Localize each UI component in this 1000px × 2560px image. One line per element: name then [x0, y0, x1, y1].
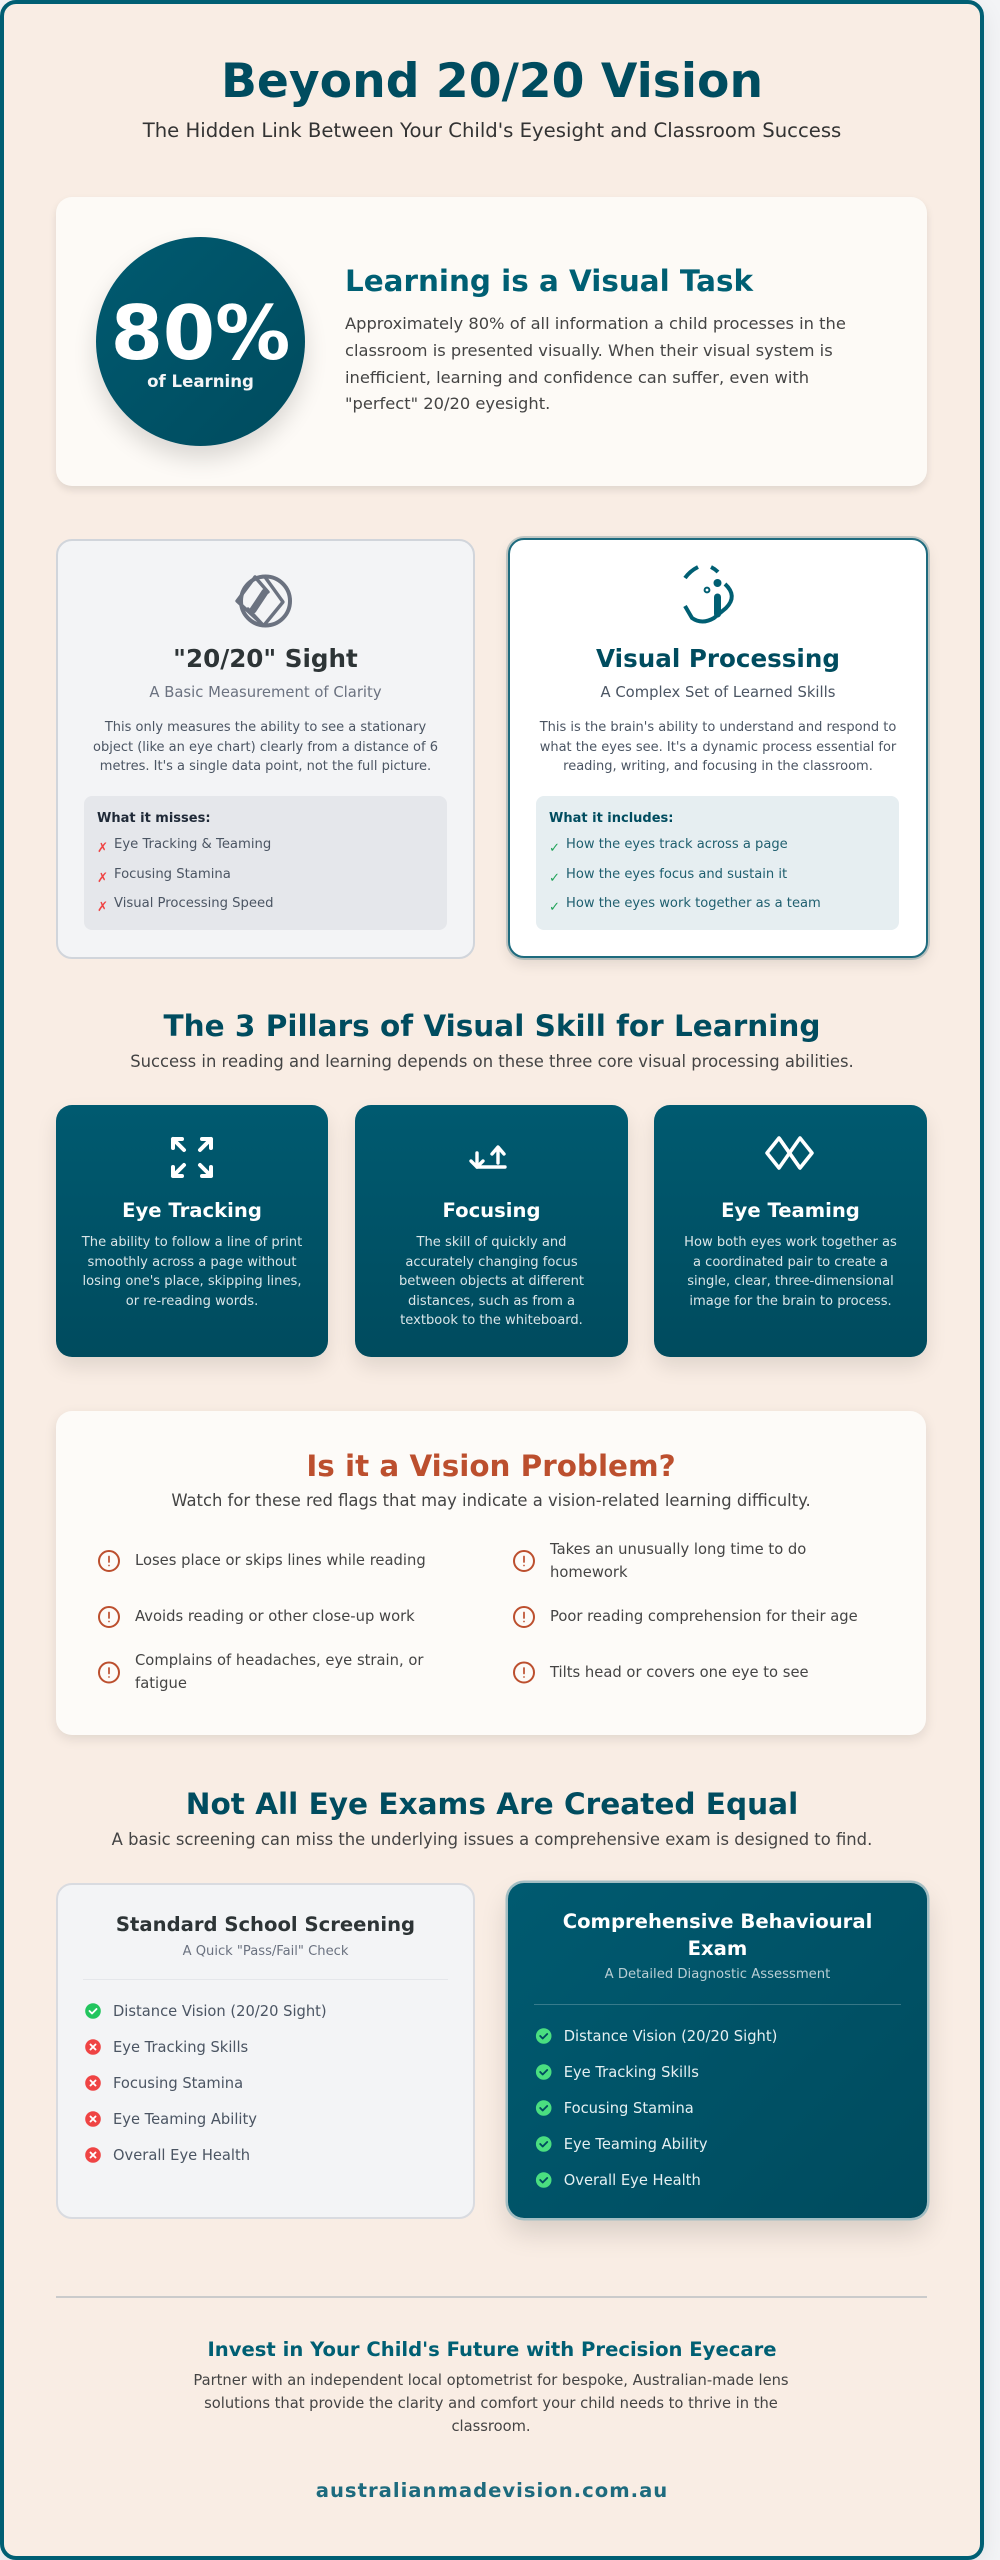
- comparison checklist: Eye Tracking Skills: [564, 2064, 699, 2081]
- card description: what the eyes see. It's a dynamic process essential for: [540, 740, 896, 755]
- footer heading: Invest in Your Child's Future with Precision Eyecare: [207, 2338, 777, 2361]
- pillar description: a coordinated pair to create a: [693, 1255, 888, 1270]
- section heading: eye exams: Not All Eye Exams Are Created Equal: [186, 1787, 798, 1821]
- red flag item: Complains of headaches, eye strain, or: [135, 1652, 423, 1669]
- pillar description: accurately changing focus: [405, 1255, 578, 1270]
- card description: [540, 720, 896, 774]
- list box: what it includes: ✓: [549, 870, 560, 886]
- section subheading: A basic screening can miss the underlying issues a comprehensive exam is designed to find.: [112, 1830, 872, 1849]
- footer text: [193, 2372, 789, 2435]
- panel body text: inefficient, learning and confidence can suffer, even with: [345, 368, 809, 387]
- icon: focus arrows: [469, 1145, 507, 1169]
- list box: what it misses: ✗: [97, 900, 108, 915]
- pillar description: The skill of quickly and: [416, 1235, 566, 1250]
- card subheading: A Complex Set of Learned Skills: [601, 684, 835, 701]
- footer website link: australianmadevision.com.au: [316, 2479, 668, 2502]
- pillar description: losing one's place, skipping lines,: [82, 1274, 302, 1289]
- list heading: What it misses:: [97, 811, 211, 826]
- pillar description: How both eyes work together as: [684, 1235, 897, 1250]
- icon: expanding arrows: [170, 1136, 214, 1178]
- comparison checklist: Focusing Stamina: [564, 2100, 694, 2117]
- panel heading: Exam: [688, 1937, 747, 1960]
- pillar title: Eye Tracking: [122, 1199, 262, 1222]
- section subheading: Success in reading and learning depends on these three core visual processing abilities.: [130, 1052, 854, 1071]
- pillar title: Eye Teaming: [721, 1199, 860, 1222]
- red flag item: Poor reading comprehension for their age: [550, 1608, 858, 1625]
- pillar description: single, clear, three-dimensional: [687, 1274, 894, 1289]
- list item: How the eyes work together as a team: [566, 896, 821, 911]
- stat caption: of Learning: [147, 372, 254, 391]
- pillar description: textbook to the whiteboard.: [400, 1313, 583, 1328]
- list box: what it includes: ✓: [549, 900, 560, 915]
- divider: [83, 1979, 448, 1980]
- panel body text: [345, 314, 846, 413]
- panel heading: Comprehensive Behavioural: [563, 1910, 872, 1933]
- section heading: 3 pillars: The 3 Pillars of Visual Skill for Learning: [164, 1009, 820, 1043]
- pillar description: [684, 1235, 897, 1309]
- footer text: Partner with an independent local optometrist for bespoke, Australian-made lens: [193, 2372, 789, 2389]
- pillar description: [82, 1235, 302, 1309]
- footer text: solutions that provide the clarity and comfort your child needs to thrive in the: [204, 2395, 778, 2412]
- pillar description: or re-reading words.: [126, 1294, 258, 1309]
- pillar description: smoothly across a page without: [88, 1255, 296, 1270]
- list item: How the eyes track across a page: [566, 837, 788, 852]
- panel heading: Is it a Vision Problem?: [306, 1449, 676, 1483]
- pillar: eye teaming: [654, 1105, 927, 1357]
- card heading: Visual Processing: [596, 644, 840, 672]
- pillar description: between objects at different: [399, 1274, 584, 1289]
- list item: [97, 866, 231, 886]
- footer divider: [56, 2296, 927, 2298]
- icon: 20/20 lens: [235, 574, 292, 628]
- card description: reading, writing, and focusing in the classroom.: [563, 759, 873, 774]
- list heading: What it includes:: [549, 811, 674, 826]
- panel: red flags: [56, 1411, 926, 1735]
- panel subheading: Watch for these red flags that may indicate a vision-related learning difficulty.: [171, 1491, 811, 1510]
- card description: object (like an eye chart) clearly from a distance of 6: [93, 740, 438, 755]
- card description: This is the brain's ability to understand and respond to: [540, 720, 896, 735]
- comparison checklist: Focusing Stamina: [113, 2075, 243, 2092]
- pillar description: image for the brain to process.: [689, 1294, 892, 1309]
- panel: visual processing: [508, 538, 928, 958]
- red flag item: [135, 1652, 424, 1692]
- red flag item: Tilts head or covers one eye to see: [550, 1664, 809, 1680]
- stat circle: 80%: [96, 237, 305, 446]
- footer text: classroom.: [451, 2418, 531, 2435]
- list box: what it misses: ✗: [97, 870, 108, 886]
- list box: what it misses: [84, 796, 447, 930]
- stat number: 80%: [111, 289, 290, 377]
- red flag icons: [98, 1550, 535, 1684]
- red flag item: homework: [550, 1564, 628, 1581]
- red flag item: Loses place or skips lines while reading: [135, 1552, 426, 1569]
- comparison checklist: Eye Tracking Skills: [113, 2039, 248, 2056]
- list item: Eye Tracking & Teaming: [114, 837, 271, 852]
- card heading: "20/20" Sight: [173, 644, 358, 672]
- panel subheading: A Detailed Diagnostic Assessment: [605, 1967, 830, 1982]
- divider: [534, 2004, 901, 2005]
- panel: learning is a visual task: [56, 197, 927, 486]
- panel: comprehensive behavioural exam: [508, 1883, 927, 2218]
- pillar title: Focusing: [443, 1199, 540, 1222]
- comparison checklist: [536, 2028, 777, 2189]
- panel body text: Approximately 80% of all information a child processes in the: [345, 314, 846, 333]
- comparison checklist: Overall Eye Health: [564, 2172, 701, 2189]
- panel heading: Learning is a Visual Task: [345, 264, 753, 298]
- panel subheading: A Quick "Pass/Fail" Check: [183, 1944, 348, 1959]
- panel body text: classroom is presented visually. When their visual system is: [345, 341, 833, 360]
- card description: metres. It's a single data point, not the full picture.: [100, 759, 431, 774]
- pillar: focusing: [355, 1105, 628, 1357]
- comparison checklist: [85, 2003, 327, 2164]
- card description: [93, 720, 438, 774]
- card description: This only measures the ability to see a stationary: [105, 720, 426, 735]
- list item: Visual Processing Speed: [114, 896, 274, 911]
- panel: 20/20 sight: [56, 539, 475, 959]
- pillar description: distances, such as from a: [408, 1294, 575, 1309]
- list box: what it includes: ✓: [549, 841, 560, 856]
- red flag item: [550, 1541, 806, 1581]
- list box: what it includes: [536, 796, 899, 930]
- red flag item: fatigue: [135, 1675, 187, 1692]
- comparison checklist: Distance Vision (20/20 Sight): [113, 2003, 327, 2020]
- red flag item: Takes an unusually long time to do: [550, 1541, 806, 1558]
- list box: what it misses: ✗: [97, 841, 108, 856]
- panel body text: "perfect" 20/20 eyesight.: [345, 394, 550, 413]
- comparison checklist: Overall Eye Health: [113, 2147, 250, 2164]
- pillar description: [399, 1235, 584, 1328]
- list item: Focusing Stamina: [114, 866, 231, 882]
- comparison checklist: Eye Teaming Ability: [564, 2136, 708, 2153]
- panel: standard school screening: [56, 1883, 475, 2219]
- pillar: eye tracking: [56, 1105, 328, 1357]
- title: Beyond 20/20 Vision: [221, 54, 763, 109]
- red flag item: Avoids reading or other close-up work: [135, 1608, 415, 1625]
- list item: How the eyes focus and sustain it: [566, 866, 787, 882]
- card subheading: A Basic Measurement of Clarity: [149, 684, 382, 701]
- panel heading: [563, 1910, 872, 1960]
- icon: brain/eye process: [683, 565, 734, 624]
- pillar description: The ability to follow a line of print: [82, 1235, 302, 1250]
- comparison checklist: Eye Teaming Ability: [113, 2111, 257, 2128]
- comparison checklist: Distance Vision (20/20 Sight): [564, 2028, 777, 2045]
- panel heading: Standard School Screening: [116, 1913, 415, 1936]
- icon: linked diamonds: [765, 1136, 814, 1170]
- subtitle: The Hidden Link Between Your Child's Eyesight and Classroom Success: [143, 119, 841, 142]
